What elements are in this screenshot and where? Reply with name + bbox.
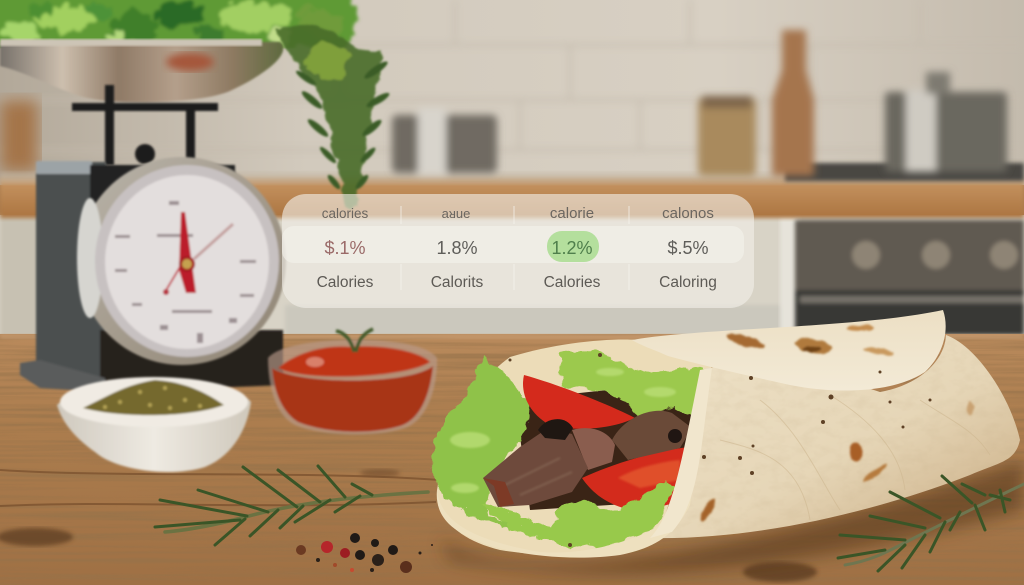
header row: calonos xyxy=(662,205,714,222)
rosemary sprig left xyxy=(155,466,428,545)
label row xyxy=(317,274,717,291)
front lettuce xyxy=(478,478,674,546)
tortilla folds xyxy=(720,395,990,520)
meat chunks xyxy=(572,428,615,470)
kitchen scale xyxy=(0,0,352,392)
label row: Calories xyxy=(544,274,601,291)
callout: green highlight xyxy=(547,231,599,262)
pots and jars xyxy=(392,30,1007,176)
char spots xyxy=(698,325,974,523)
tomato slices xyxy=(523,375,635,429)
rosemary sprig right xyxy=(838,476,1024,571)
scale body xyxy=(20,161,283,392)
scale bowl xyxy=(0,42,283,102)
value row: 1.8% xyxy=(436,238,478,258)
speckles xyxy=(508,353,932,547)
frosted panel background xyxy=(282,194,754,308)
lettuce in bowl xyxy=(0,0,352,42)
tortilla roll body xyxy=(652,335,1020,538)
label row: Caloring xyxy=(659,274,717,291)
header row: calories xyxy=(322,206,369,221)
hanging herbs xyxy=(272,24,391,205)
wooden table xyxy=(0,334,1024,585)
label row: Calorits xyxy=(431,274,484,291)
sauce bowl xyxy=(268,329,437,434)
value row: $.1% xyxy=(324,238,366,258)
spice dish xyxy=(57,377,251,472)
tortilla texture xyxy=(640,330,1024,545)
dark filling shadow xyxy=(515,380,700,510)
outer tortilla rim xyxy=(437,440,700,558)
header row: calorie xyxy=(550,205,594,222)
calorie comparison panel text xyxy=(317,205,717,291)
value row: 1.2% xyxy=(551,238,593,258)
wrap xyxy=(430,310,1024,574)
fold highlight xyxy=(650,368,712,538)
left lettuce xyxy=(430,352,526,530)
peppercorns xyxy=(296,533,433,573)
value row xyxy=(324,238,709,258)
scale stand xyxy=(72,85,218,165)
wrap shadow xyxy=(440,460,1024,574)
label row: Calories xyxy=(317,274,374,291)
tortilla top flap xyxy=(632,310,946,391)
back lettuce xyxy=(558,346,700,418)
inner tortilla xyxy=(437,340,712,554)
header row xyxy=(322,205,714,222)
scale dial xyxy=(77,157,286,365)
stove xyxy=(785,163,1024,335)
kitchen background xyxy=(0,0,1024,340)
value row: $.5% xyxy=(667,238,709,258)
header row: aᴚue xyxy=(442,206,470,221)
